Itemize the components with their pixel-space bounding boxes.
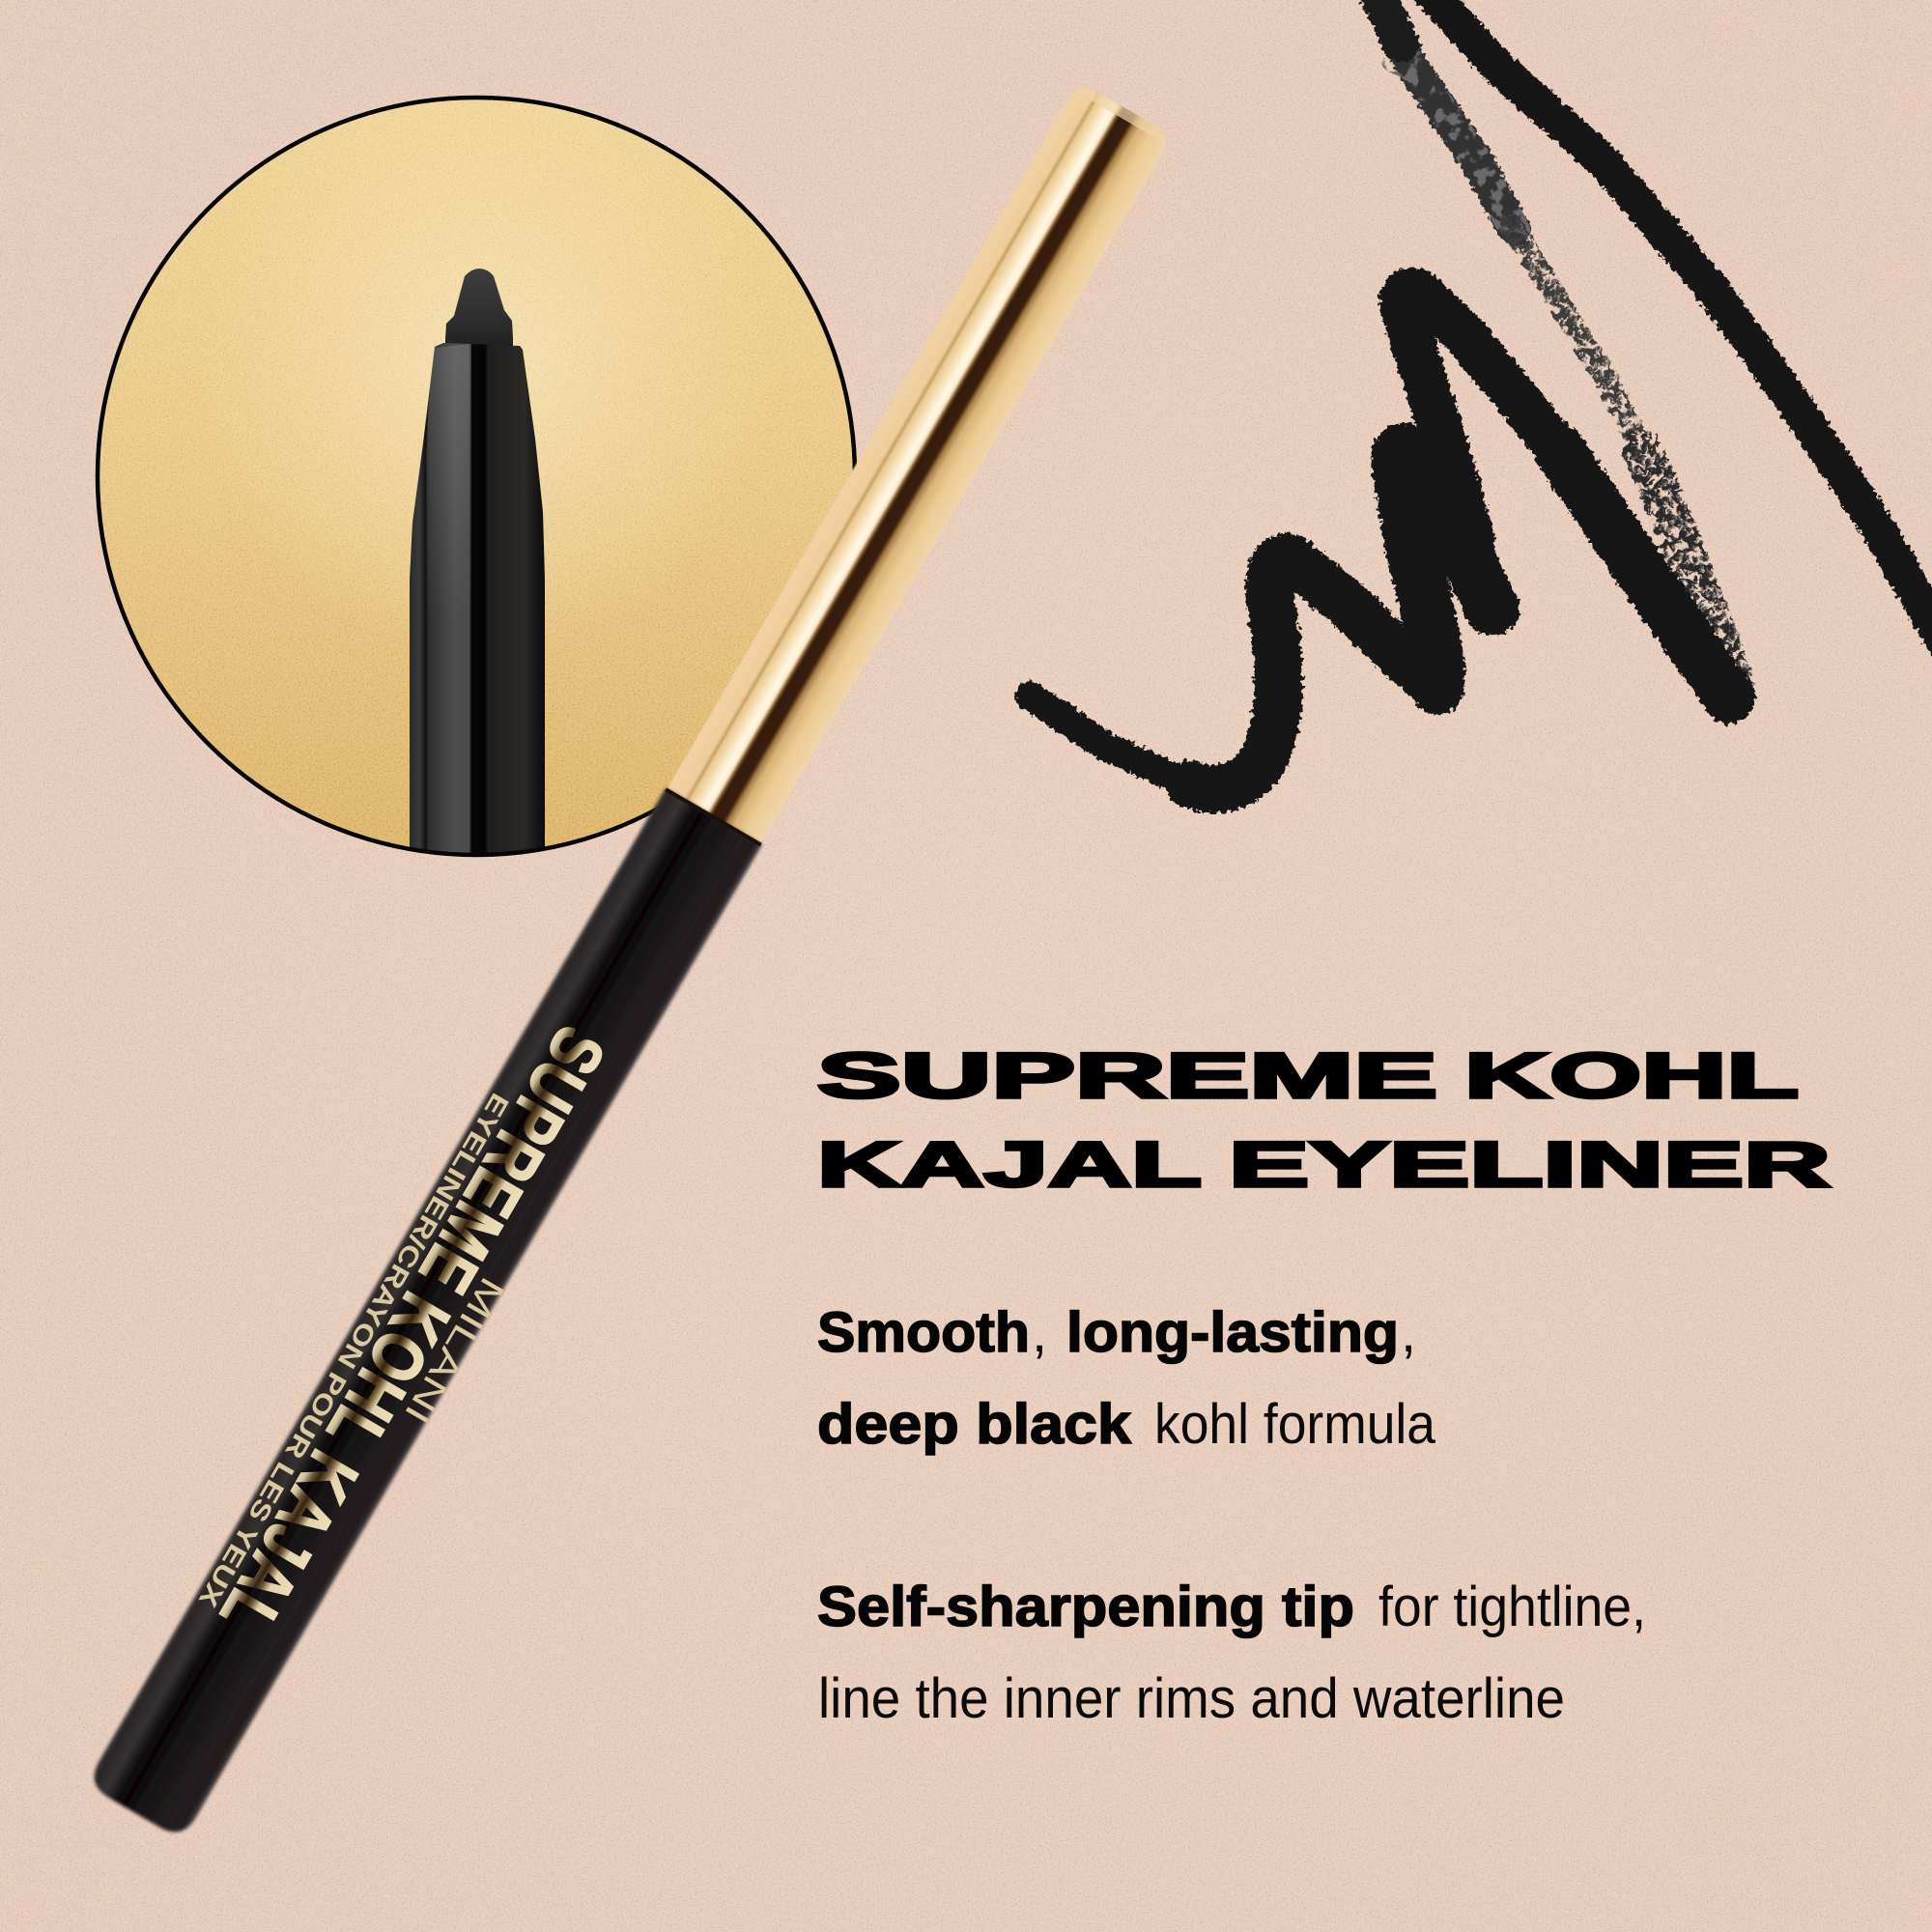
black barrel [86,788,762,1840]
text block: formula benefit [817,1301,1436,1456]
heading: product title: EYELINER [1229,1128,1831,1200]
heading: product title: KOHL [1464,1039,1799,1111]
gold circle [99,99,854,854]
text block: tip benefit [817,1576,1646,1730]
descriptor: EYELINER/CRAYON POUR LES YEUX [193,1089,515,1612]
product name: SUPREME KOHL KAJAL [205,1013,621,1649]
heading: product title: SUPREME [817,1039,1437,1111]
dry grey stroke [1391,29,1734,686]
text block: formula benefit: Smooth [817,1301,1030,1364]
text block: formula benefit: deep black [817,1393,1132,1456]
gold cap [666,82,1172,846]
close-up pencil tip [410,269,545,869]
heading: product title [817,1039,1831,1200]
barrel label text [192,1006,643,1662]
text block: formula benefit: , [1032,1301,1047,1364]
text block: tip benefit: Self-sharpening tip [817,1576,1354,1638]
circle outline [98,98,855,855]
swatch: eyeliner scribble [1030,0,1932,788]
text block: tip benefit: for tightline, [1378,1576,1646,1638]
text block: tip benefit: line the inner rims and waterline [818,1667,1565,1730]
solid scribble strokes [1030,0,1932,788]
text block: formula benefit: long-lasting [1066,1301,1399,1364]
text block: formula benefit: kohl formula [1154,1393,1436,1456]
eyeliner pencil product [85,80,1181,1845]
barrel collar [665,788,762,846]
brand name: MILANI [397,1270,513,1431]
heading: product title: KAJAL [817,1128,1202,1200]
text block: formula benefit: , [1401,1301,1416,1364]
